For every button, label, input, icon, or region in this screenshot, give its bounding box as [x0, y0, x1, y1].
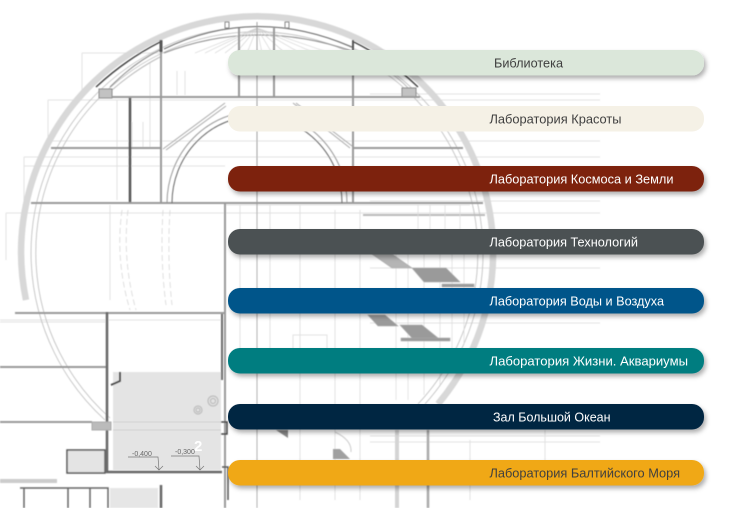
- bar: Зал Большой Океан: Зал Большой Океан: [493, 410, 610, 424]
- bar: Лаборатория Жизни. Аквариумы: [228, 348, 704, 374]
- bar: Лаборатория Технологий: Лаборатория Технологий: [490, 234, 638, 250]
- bar: Лаборатория Жизни. Аквариумы: Лаборатория Жизни. Аквариумы: [490, 354, 688, 368]
- bar: Лаборатория Балтийского Моря: Лаборатория Балтийского Моря: [490, 466, 680, 480]
- outer ring of the sphere: [21, 16, 493, 404]
- basement rooms: [20, 485, 161, 508]
- elevation label -0.400: [128, 451, 163, 470]
- bar: Лаборатория Красоты: Лаборатория Красоты: [490, 112, 622, 126]
- round columns: [194, 396, 218, 414]
- bar: Лаборатория Космоса и Земли: Лаборатория Космоса и Земли: [490, 172, 674, 186]
- staircase lower: [368, 315, 450, 341]
- bar: Библиотека: [228, 50, 704, 76]
- bar: Лаборатория Технологий: [228, 229, 704, 254]
- dome caps: [99, 89, 112, 98]
- elevation label -0.400: -0,400: [132, 451, 152, 458]
- inner ring lines: [31, 27, 483, 420]
- elevation label -0.300: [171, 449, 204, 470]
- lower walls: [221, 314, 223, 380]
- structural floors and walls: [0, 28, 485, 508]
- architectural section drawing: [0, 16, 600, 508]
- pale horizontal guide lines: [0, 53, 600, 500]
- skylight rays: [195, 28, 330, 53]
- bar: Зал Большой Океан: [228, 404, 704, 430]
- bar: Лаборатория Воды и Воздуха: Лаборатория Воды и Воздуха: [490, 294, 665, 308]
- dome roof lines: [110, 26, 410, 90]
- elevation label -0.300: -0,300: [175, 449, 195, 456]
- inner arch: [163, 103, 352, 203]
- bar: Лаборатория Балтийского Моря: [228, 460, 704, 486]
- bar: Лаборатория Космоса и Земли: [228, 166, 704, 192]
- staircase upper: [372, 254, 474, 287]
- thin lines around the stairs: [396, 205, 464, 400]
- floor number: 2: [194, 438, 202, 455]
- bar: Лаборатория Воды и Воздуха: [228, 288, 704, 314]
- bar: Лаборатория Красоты: [228, 106, 704, 132]
- small staircase: [276, 430, 288, 438]
- small room at left: [67, 450, 105, 473]
- bar: Библиотека: Библиотека: [494, 56, 564, 70]
